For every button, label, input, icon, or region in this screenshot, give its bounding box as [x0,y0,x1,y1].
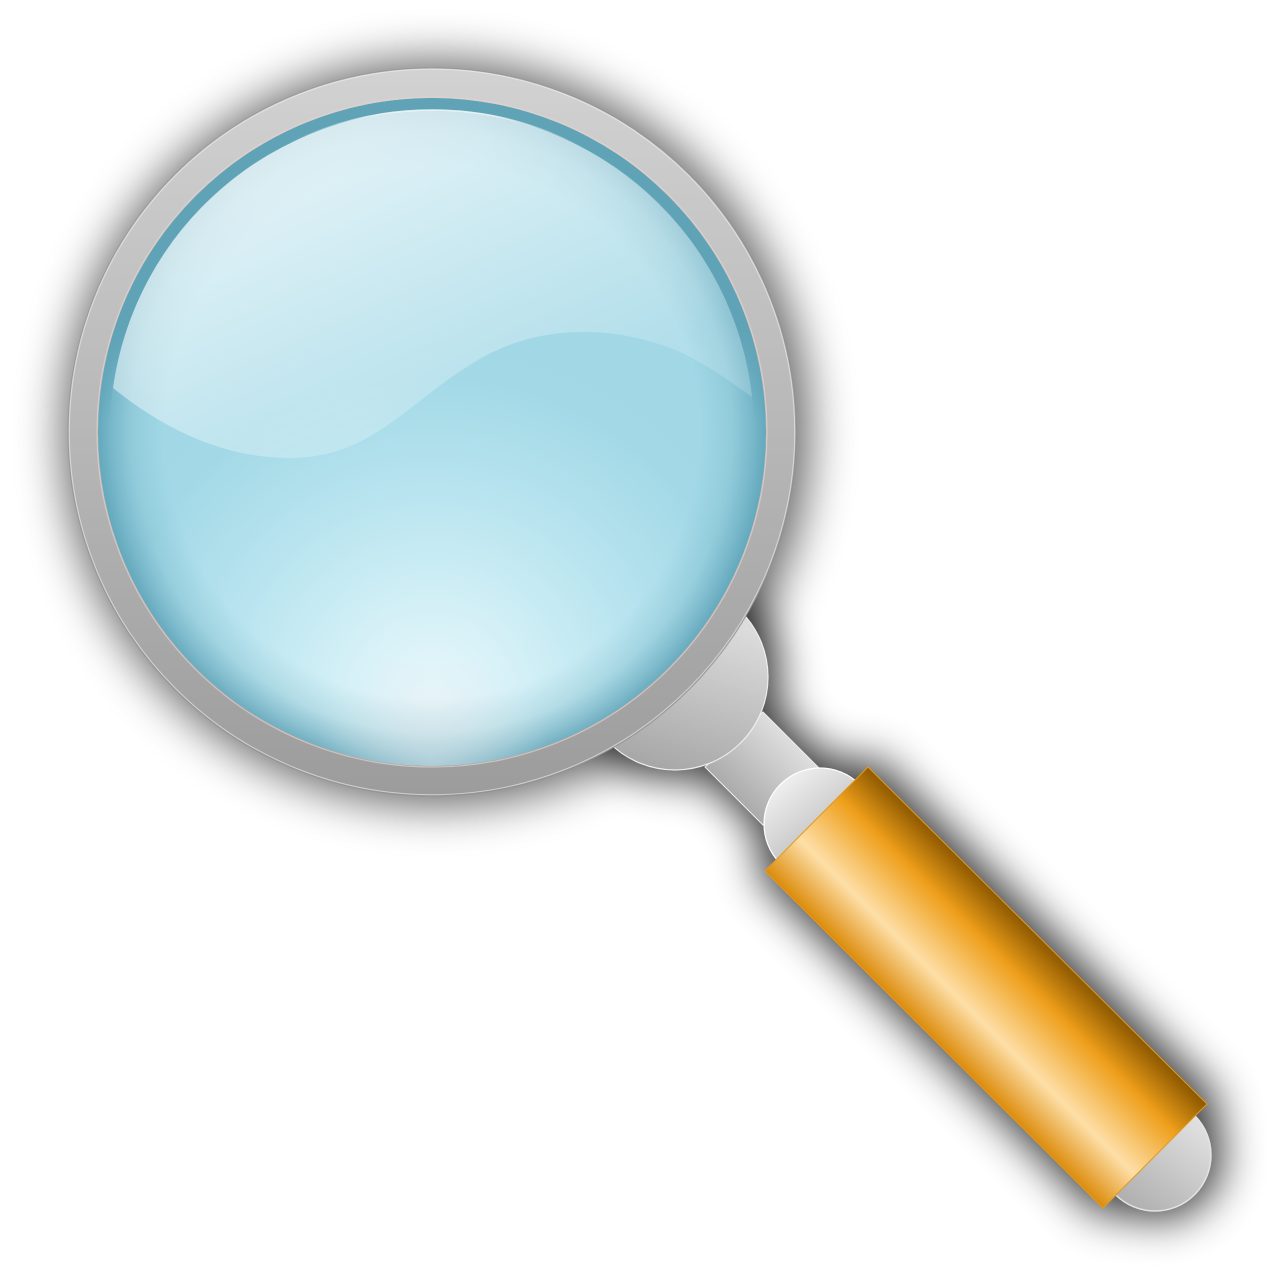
lens top highlight line [290,110,574,143]
wooden handle [765,767,1207,1208]
handle shaft [705,712,820,825]
knob [764,768,876,880]
gloss highlight [113,110,752,458]
lens [98,98,766,766]
end cap [1099,1099,1211,1211]
metal rim [68,68,796,796]
collar [582,584,768,770]
